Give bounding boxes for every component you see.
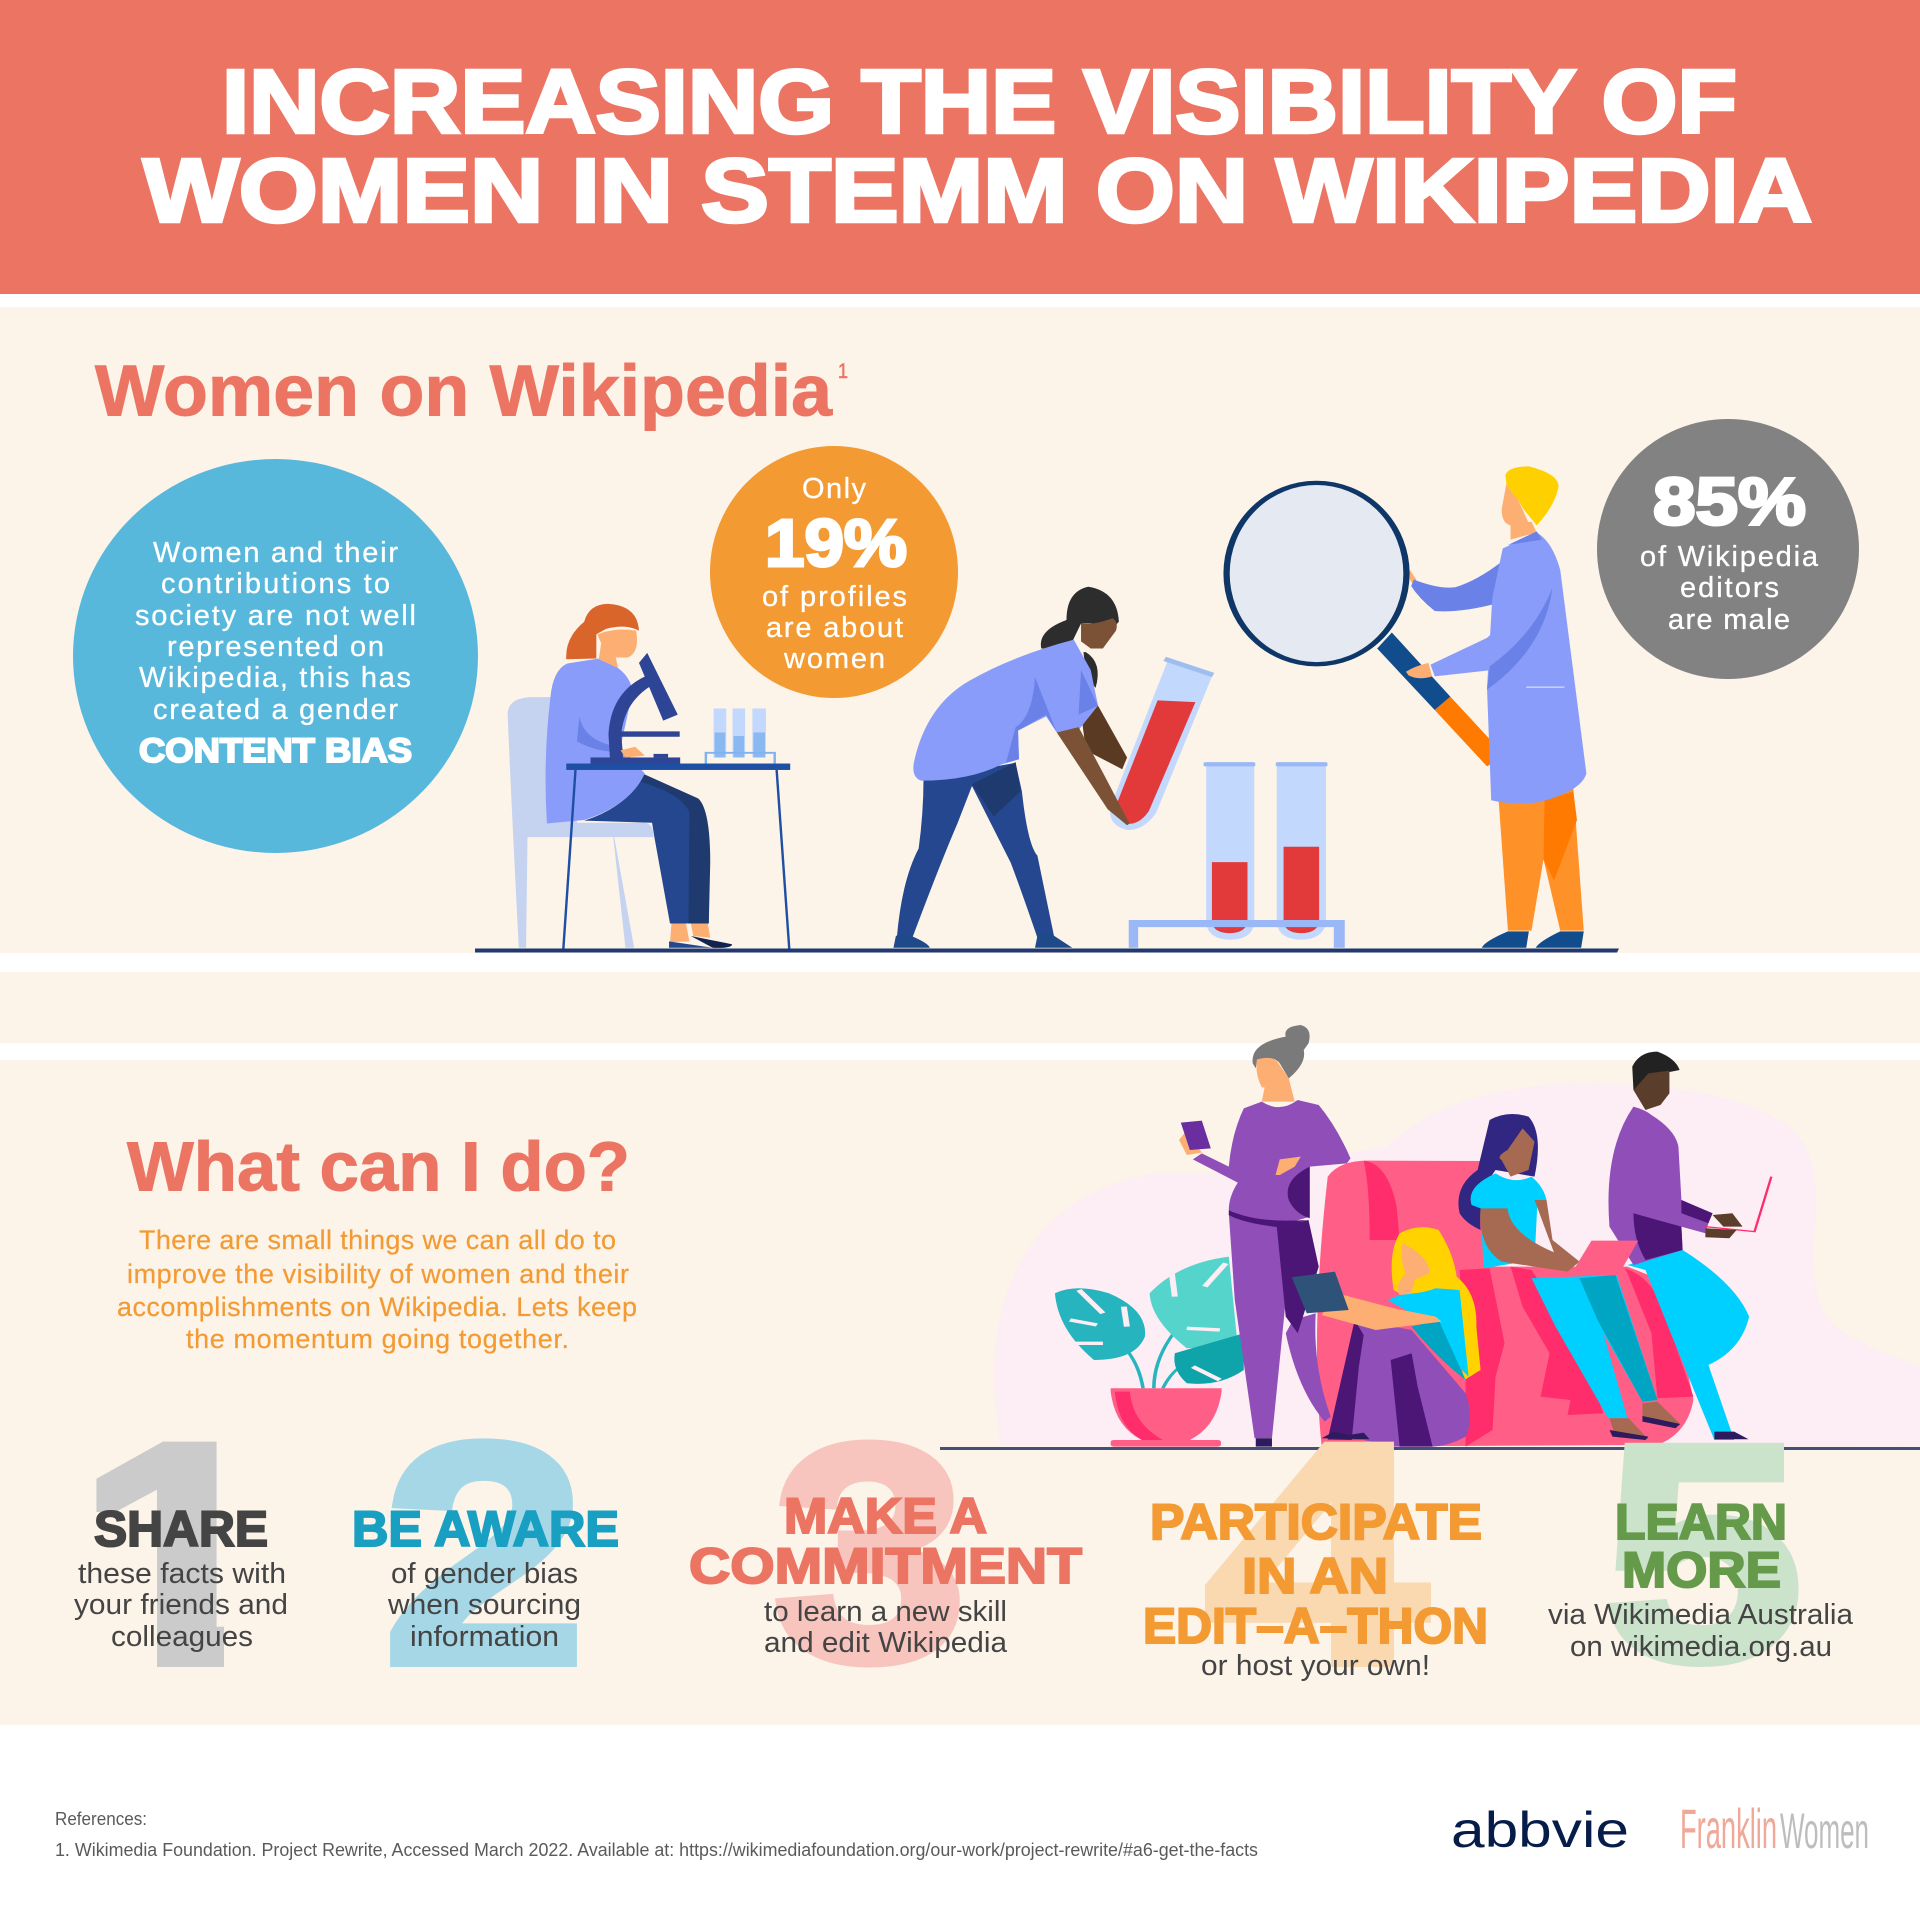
text: intro paragraph: improve the visibility of women and their — [127, 1259, 629, 1289]
action 2: be aware: information — [410, 1621, 559, 1653]
text: content bias statement: society are not well — [135, 600, 416, 632]
blonde woman with tablet — [1292, 1227, 1481, 1447]
numeral 4: 4 — [1204, 1377, 1431, 1730]
action 4: participate in an edit-a-thon: IN AN — [1242, 1548, 1388, 1604]
action 3: make a commitment: COMMITMENT — [689, 1538, 1082, 1594]
illustration: test tubes in rack — [1129, 762, 1345, 948]
action 3: make a commitment — [689, 1488, 1082, 1659]
action 1: share — [74, 1501, 288, 1653]
heading: What can I do?: What can I do? — [127, 1128, 630, 1206]
text: content bias statement: contributions to — [161, 568, 390, 600]
text: content bias statement: Wikipedia, this has — [139, 662, 411, 694]
panel: content bias circle — [73, 459, 478, 853]
man with laptop — [1608, 1052, 1771, 1440]
text: 19% of profiles are about women: 19% — [765, 506, 907, 581]
numeral 3: 3 — [772, 1379, 968, 1726]
text: intro paragraph: There are small things we can all do to — [139, 1225, 616, 1255]
text: intro paragraph: the momentum going together. — [186, 1324, 569, 1354]
logo: abbvie: abbvie — [1451, 1802, 1629, 1858]
title banner — [0, 0, 1920, 294]
title: INCREASING THE VISIBILITY OF — [222, 52, 1737, 152]
illustration: group using devices on sofa — [994, 1025, 1920, 1447]
illustration: seated woman at microscope — [508, 604, 790, 949]
text: 19% of profiles are about women: women — [783, 643, 885, 675]
plant — [1055, 1257, 1244, 1447]
text: content bias statement — [135, 537, 416, 770]
text: 19% of profiles are about women — [762, 473, 907, 675]
numeral 2: 2 — [382, 1377, 587, 1730]
text: 19% of profiles are about women: Only — [802, 473, 866, 505]
action 3: make a commitment: and edit Wikipedia — [764, 1627, 1007, 1659]
action 2: be aware: of gender bias — [391, 1558, 578, 1590]
woman with long dark hair and laptop — [1458, 1114, 1680, 1440]
action 5: learn more — [1548, 1494, 1853, 1663]
action 1: share: these facts with — [78, 1558, 286, 1590]
text: content bias statement: CONTENT BIAS — [139, 732, 412, 770]
illustration: man with magnifying glass — [1227, 466, 1586, 948]
text: intro paragraph: accomplishments on Wikipedia. Lets keep — [117, 1292, 637, 1322]
title: WOMEN IN STEMM ON WIKIPEDIA — [143, 142, 1812, 242]
text: content bias statement: Women and their — [153, 537, 398, 569]
action 4: participate in an edit-a-thon: or host your own! — [1201, 1650, 1430, 1682]
action 1: share: colleagues — [111, 1621, 253, 1653]
action 5: learn more: MORE — [1622, 1542, 1781, 1598]
action 1: share: your friends and — [74, 1589, 288, 1621]
action 5: learn more: via Wikimedia Australia — [1548, 1599, 1853, 1631]
action 5: learn more: on wikimedia.org.au — [1570, 1631, 1832, 1663]
action 3: make a commitment: to learn a new skill — [764, 1596, 1007, 1628]
text: 85% of Wikipedia editors are male: editors — [1680, 572, 1779, 604]
panel: 85% stat circle — [1597, 419, 1859, 679]
action 4: participate in an edit-a-thon: PARTICIPATE — [1150, 1494, 1482, 1550]
numeral 1: 1 — [76, 1377, 280, 1730]
text: 85% of Wikipedia editors are male — [1640, 464, 1819, 636]
action 1: share: SHARE — [94, 1501, 268, 1557]
title — [143, 52, 1812, 242]
sofa — [1317, 1161, 1693, 1447]
references — [55, 1809, 1258, 1860]
numeral 5: 5 — [1602, 1379, 1804, 1726]
action 5: learn more: LEARN — [1615, 1494, 1787, 1550]
text: 85% of Wikipedia editors are male: 85% — [1653, 464, 1806, 540]
references: 1. Wikimedia Foundation. Project Rewrite, Accessed March 2022. Available at: https://wikimediafoundation.org/our-work/project-rewrite/#a6-get-the-facts — [55, 1840, 1258, 1860]
action 2: be aware — [352, 1501, 619, 1653]
logo: Franklin Women: Franklin — [1680, 1797, 1777, 1860]
text: 19% of profiles are about women: of profiles — [762, 581, 907, 613]
action 3: make a commitment: MAKE A — [784, 1488, 987, 1544]
woman with phone — [1179, 1025, 1350, 1447]
text: content bias statement: represented on — [167, 631, 384, 663]
heading: Women on Wikipedia: 1 — [838, 360, 848, 383]
text: content bias statement: created a gender — [153, 694, 398, 726]
ground line: lab scene — [475, 948, 1619, 952]
text: 85% of Wikipedia editors are male: are male — [1668, 604, 1790, 636]
references: References: — [55, 1809, 147, 1829]
panel: 19% stat circle — [710, 446, 958, 698]
ground line: group scene — [940, 1447, 1920, 1450]
action 2: be aware: BE AWARE — [352, 1501, 619, 1557]
text: intro paragraph — [117, 1225, 637, 1354]
action 4: participate in an edit-a-thon: EDIT–A–THON — [1143, 1598, 1488, 1654]
action 2: be aware: when sourcing — [387, 1589, 581, 1621]
text: 85% of Wikipedia editors are male: of Wikipedia — [1640, 541, 1819, 573]
action 4: participate in an edit-a-thon — [1143, 1494, 1488, 1682]
text: 19% of profiles are about women: are about — [766, 612, 903, 644]
heading: Women on Wikipedia: Women on Wikipedia — [95, 352, 833, 432]
illustration: bending woman with test tube — [893, 587, 1214, 948]
